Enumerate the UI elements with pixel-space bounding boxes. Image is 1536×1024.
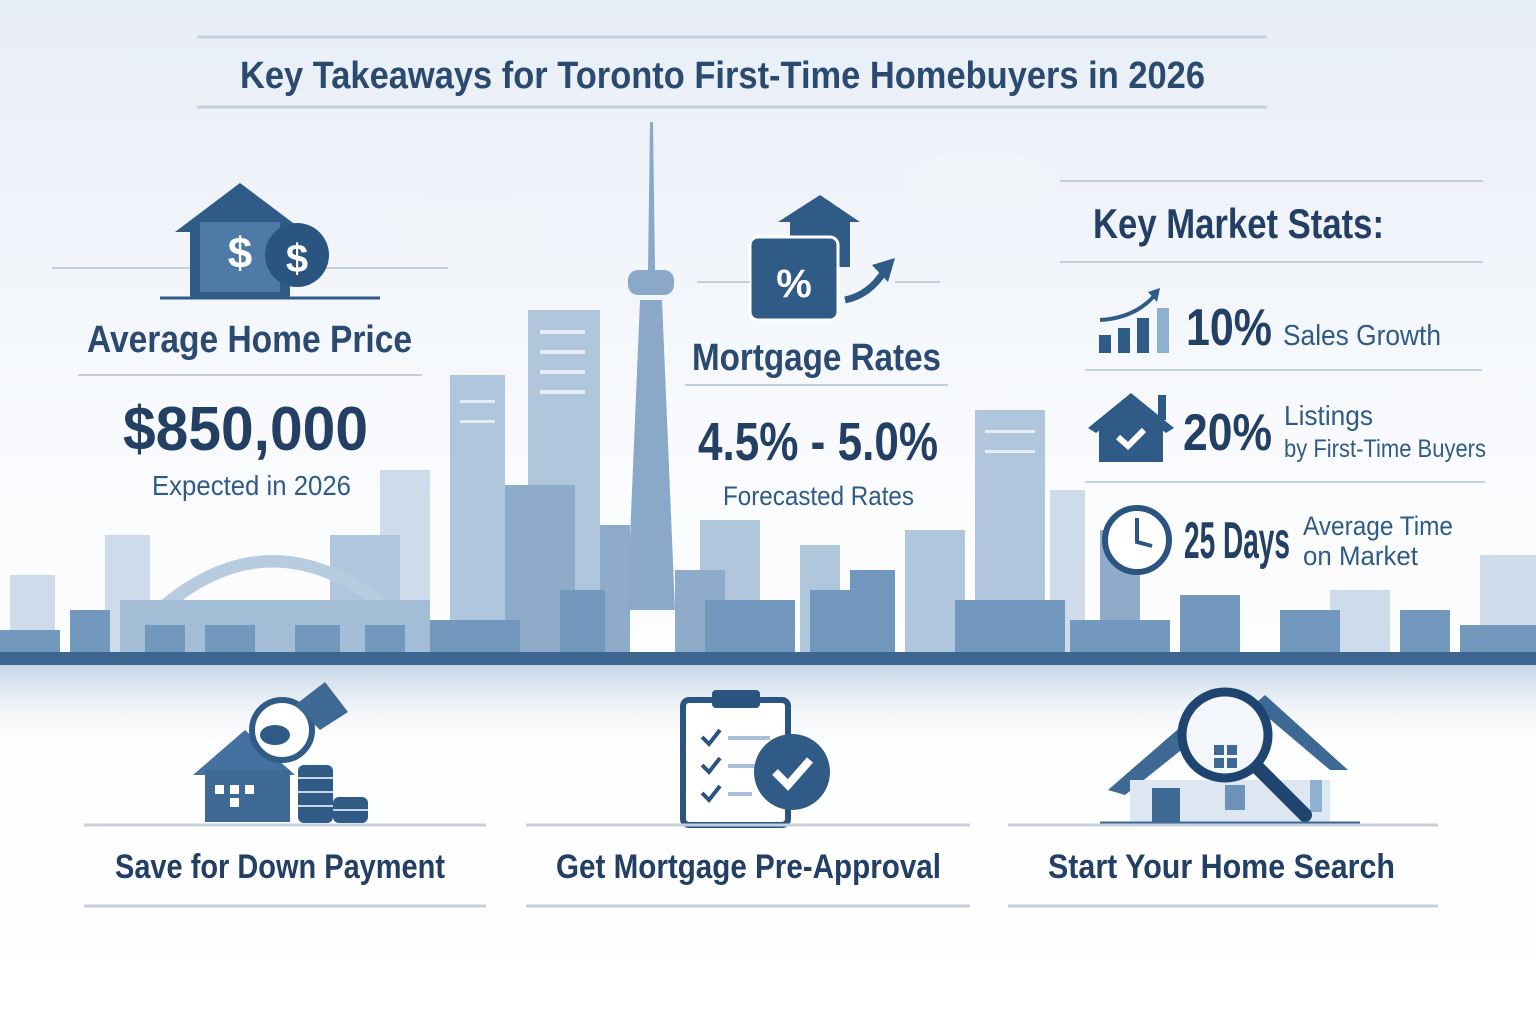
icon: percent with arrow: %	[776, 262, 812, 306]
icon: house with magnifier	[1100, 692, 1360, 823]
stat: sales growth: 10%	[1186, 299, 1272, 357]
stat: sales growth: Sales Growth	[1283, 320, 1441, 352]
icon: house with dollars: $	[286, 237, 308, 281]
panel: average home price	[52, 183, 448, 501]
stat: time on market: 25 Days	[1184, 512, 1290, 570]
stat: listings: 20%	[1183, 404, 1272, 462]
stat: listings: by First-Time Buyers	[1284, 435, 1486, 463]
panel: mortgage pre-approval	[526, 690, 970, 906]
panel: average home price: $850,000	[123, 395, 368, 464]
stat: listings: Listings	[1284, 400, 1373, 431]
icon: house with coins	[193, 682, 368, 823]
stadium arch	[150, 555, 400, 610]
panel: save for down payment	[84, 682, 486, 906]
panel: average home price: Average Home Price	[87, 319, 412, 361]
panel: key market stats: Key Market Stats:	[1093, 200, 1384, 247]
panel: average home price: Expected in 2026	[152, 470, 351, 501]
panel: mortgage pre-approval: Get Mortgage Pre-Approval	[556, 848, 941, 886]
title: Key Takeaways for Toronto First-Time Homebuyers in 2026	[240, 55, 1205, 97]
panel: mortgage rates	[685, 195, 948, 511]
stat: listings	[1088, 393, 1486, 463]
icon: clipboard with check	[683, 690, 830, 825]
stat: time on market	[1105, 508, 1453, 572]
panel: key market stats	[1060, 181, 1486, 572]
icon: house with dollars	[160, 183, 380, 298]
panel: save for down payment: Save for Down Payment	[115, 848, 445, 886]
panel: mortgage rates: Forecasted Rates	[723, 481, 914, 511]
clouds	[380, 150, 1060, 255]
panel: mortgage rates: Mortgage Rates	[692, 337, 941, 379]
stat: time on market: Average Time	[1303, 511, 1453, 541]
panel: mortgage rates: 4.5% - 5.0%	[698, 412, 938, 472]
CN tower	[627, 122, 675, 610]
icon: percent with arrow	[750, 195, 895, 320]
stat: time on market: on Market	[1303, 541, 1418, 571]
stat: sales growth	[1099, 288, 1441, 357]
panel: start home search: Start Your Home Search	[1048, 848, 1395, 886]
icon: house with dollars: $	[228, 229, 252, 278]
panel: start home search	[1008, 692, 1438, 906]
skyline	[0, 122, 1536, 750]
